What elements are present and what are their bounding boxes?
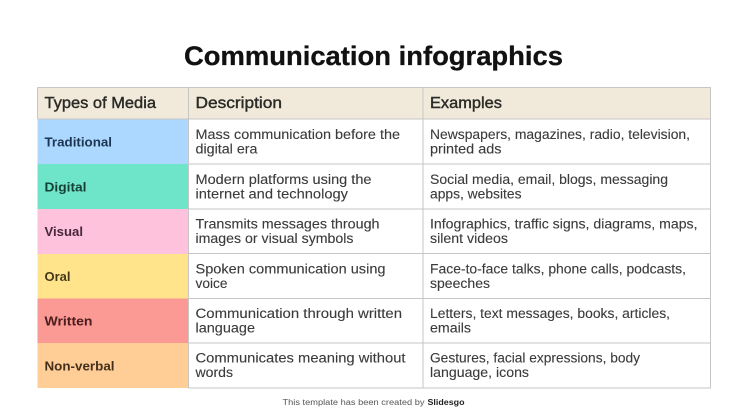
row: Digital bbox=[38, 164, 668, 209]
row: Written: emails bbox=[430, 320, 471, 336]
row: Written bbox=[38, 298, 670, 343]
row: Written: Written bbox=[44, 314, 93, 328]
row: Digital: Modern platforms using the bbox=[196, 172, 372, 187]
footer credit: This template has been created by bbox=[282, 398, 424, 407]
row: Visual: Visual bbox=[44, 224, 83, 239]
table header row: Description bbox=[196, 95, 282, 112]
row: Traditional: Newspapers, magazines, radio, television, bbox=[430, 127, 690, 142]
table header row bbox=[38, 87, 710, 119]
row: Digital: internet and technology bbox=[196, 186, 348, 202]
table bbox=[38, 87, 710, 388]
row: Traditional: printed ads bbox=[430, 142, 502, 156]
row: Traditional: Traditional bbox=[44, 134, 112, 150]
row: Oral: Oral bbox=[44, 269, 70, 284]
row: Oral: Spoken communication using bbox=[196, 262, 386, 276]
row: Written: Letters, text messages, books, articles, bbox=[430, 306, 670, 321]
table header row: Examples bbox=[430, 95, 502, 112]
row: Digital: Digital bbox=[44, 180, 86, 194]
footer credit: Slidesgo bbox=[428, 398, 465, 407]
row: Non-verbal: Non-verbal bbox=[44, 358, 114, 374]
row: Written: language bbox=[196, 320, 255, 336]
row: Oral: voice bbox=[196, 276, 228, 291]
row: Written: Communication through written bbox=[196, 306, 402, 321]
row: Non-verbal: Gestures, facial expressions, body bbox=[430, 350, 640, 366]
row: Visual: Transmits messages through bbox=[196, 216, 380, 232]
row: Non-verbal: Communicates meaning without bbox=[196, 350, 406, 366]
row: Traditional: Mass communication before the bbox=[196, 127, 400, 142]
row: Non-verbal: language, icons bbox=[430, 365, 529, 380]
row: Visual: silent videos bbox=[430, 231, 508, 246]
row: Non-verbal: words bbox=[194, 365, 233, 380]
row: Oral bbox=[38, 254, 686, 298]
row: Oral: speeches bbox=[430, 276, 490, 291]
row: Visual: images or visual symbols bbox=[196, 231, 354, 246]
row: Non-verbal bbox=[38, 343, 640, 388]
title: Communication infographics bbox=[184, 41, 563, 71]
row: Digital: Social media, email, blogs, messaging bbox=[430, 172, 668, 187]
row: Traditional: digital era bbox=[196, 142, 258, 156]
row: Traditional bbox=[38, 119, 690, 164]
row: Digital: apps, websites bbox=[430, 186, 522, 202]
table header row: Types of Media bbox=[44, 95, 156, 112]
row: Oral: Face-to-face talks, phone calls, podcasts, bbox=[430, 262, 686, 276]
row: Visual: Infographics, traffic signs, diagrams, maps, bbox=[430, 216, 698, 232]
row: Visual bbox=[38, 209, 698, 254]
